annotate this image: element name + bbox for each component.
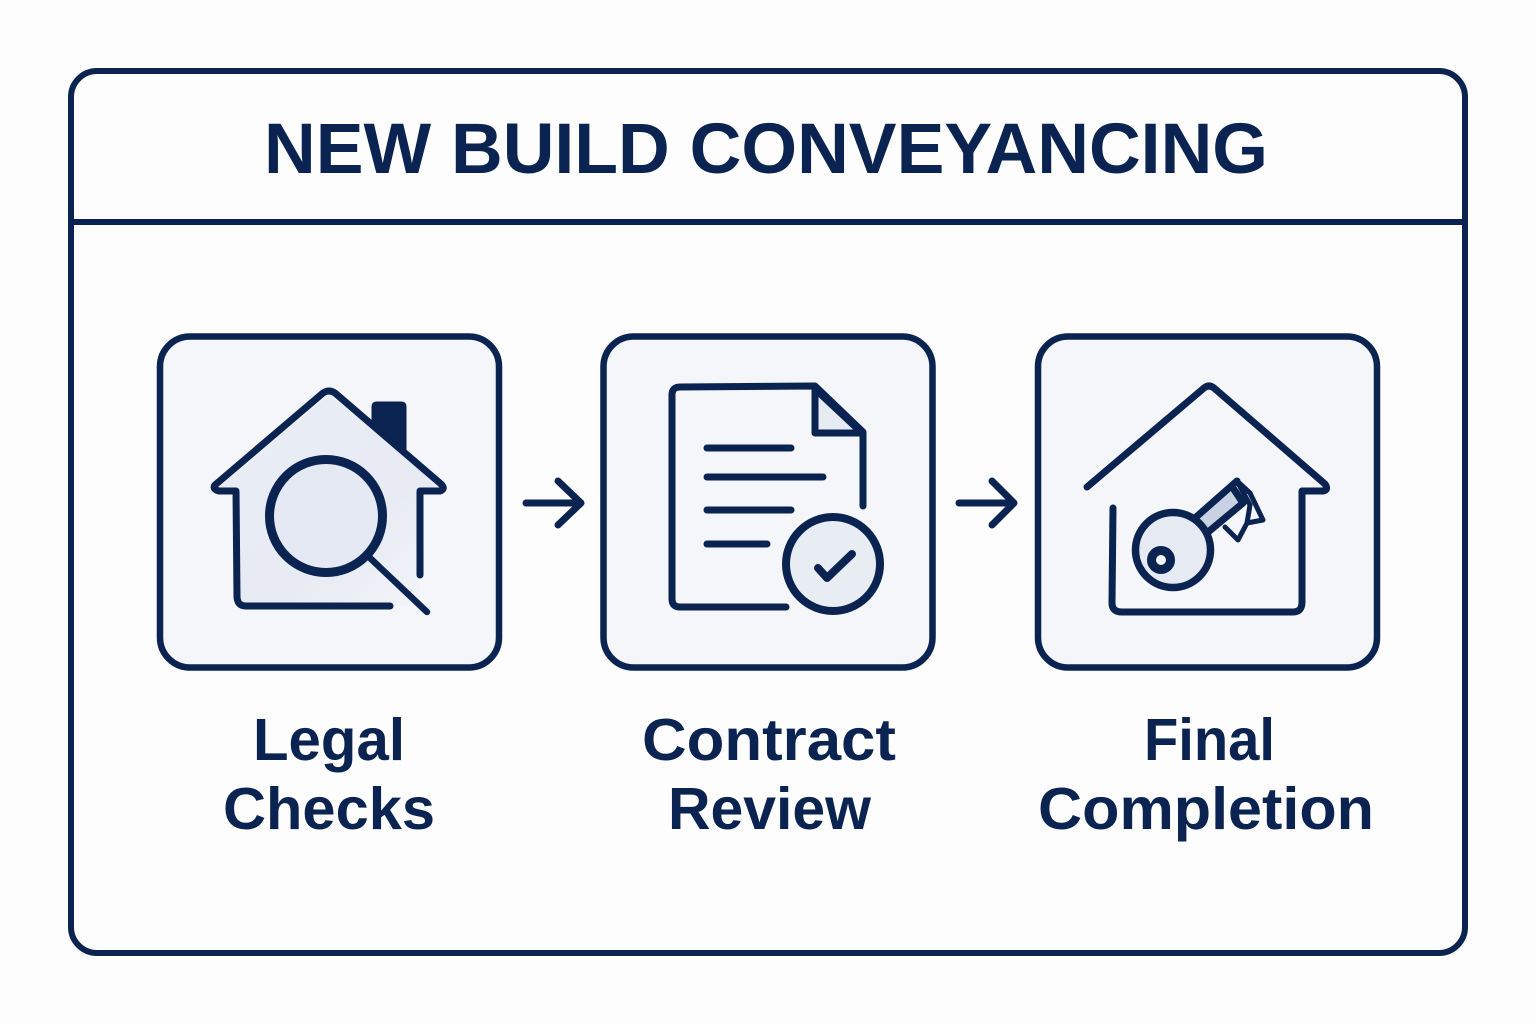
title: NEW BUILD CONVEYANCING [264, 110, 1268, 189]
panel: contract review [604, 336, 932, 668]
icon: document with check badge [672, 386, 880, 611]
label: contract review: Review [668, 776, 871, 842]
outer frame panel [71, 71, 1465, 953]
icon: house with magnifying glass [214, 391, 444, 612]
label: contract review [642, 707, 896, 842]
panel: final completion [1038, 336, 1377, 668]
label: legal checks [223, 707, 435, 842]
card: final completion [1038, 336, 1377, 668]
label: legal checks: Legal [253, 707, 405, 773]
label: final completion: Completion [1038, 776, 1374, 842]
card: contract review [604, 336, 932, 668]
card: legal checks [160, 336, 499, 668]
arrow: legal checks to contract review [526, 481, 581, 525]
label: final completion [1038, 707, 1374, 842]
label: legal checks: Checks [223, 776, 435, 842]
label: contract review: Contract [642, 707, 896, 773]
arrow: contract review to final completion [959, 481, 1014, 525]
label: final completion: Final [1144, 707, 1275, 773]
icon: house with key [1087, 386, 1327, 612]
panel: legal checks [160, 336, 499, 668]
